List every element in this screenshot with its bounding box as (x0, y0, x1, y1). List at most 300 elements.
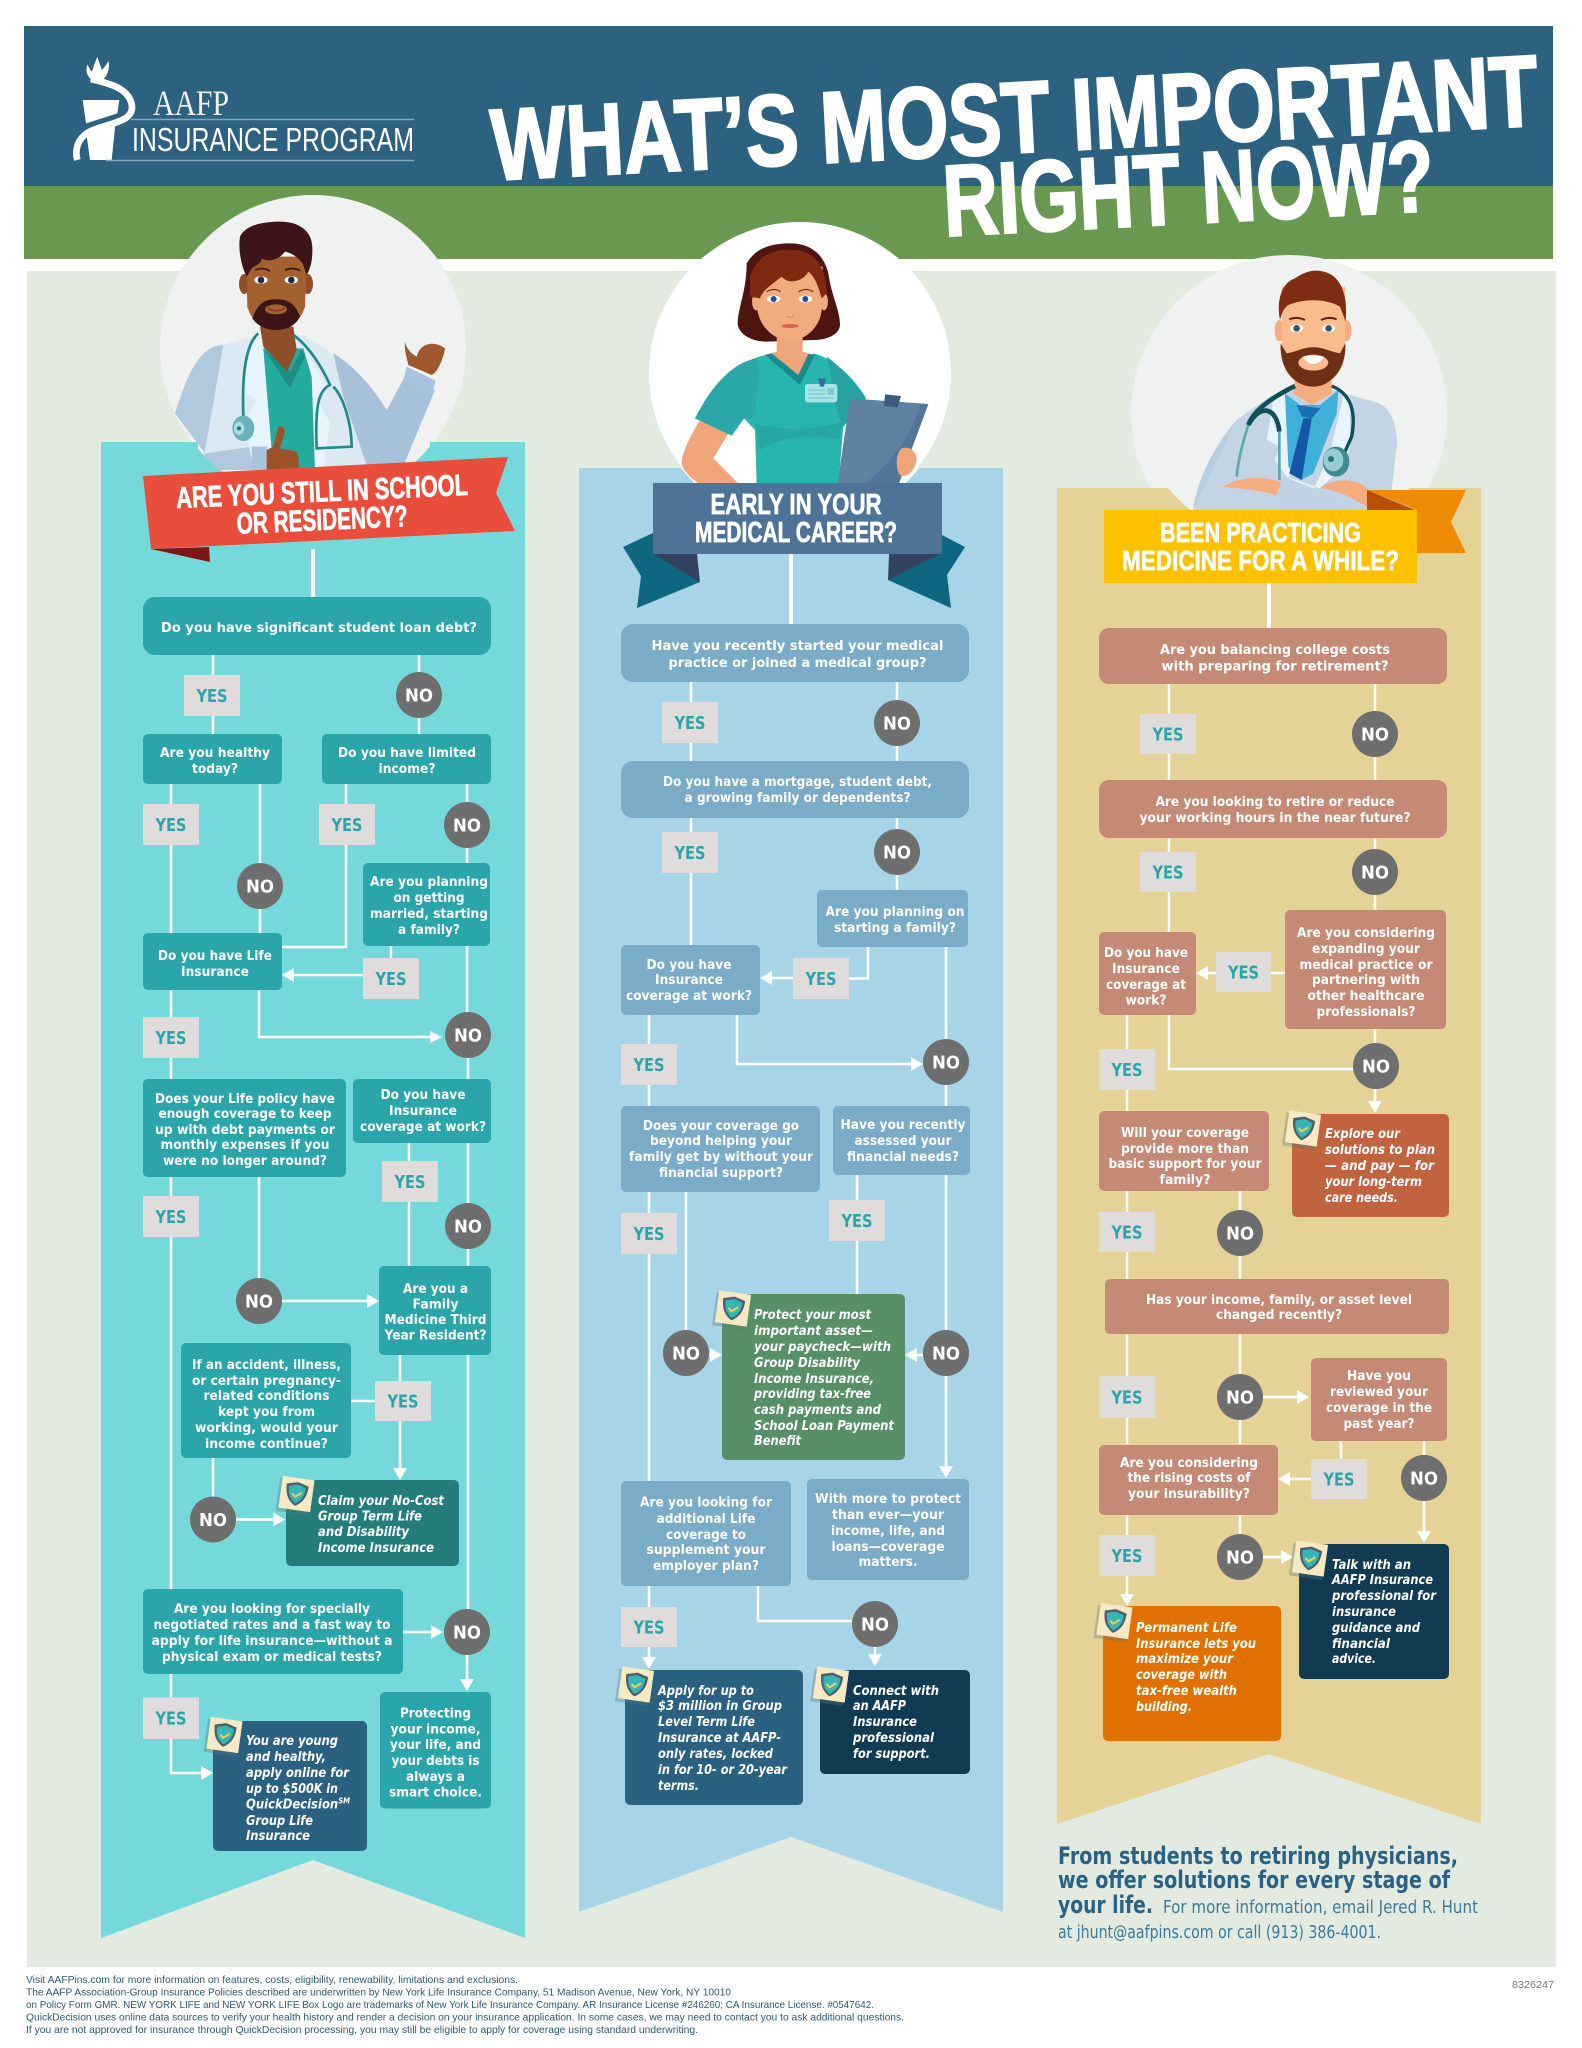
message: protecting your income: your income, (390, 1722, 480, 1738)
question: life insurance (143, 933, 282, 990)
question: getting married: married, starting (370, 906, 488, 922)
result: no-cost group term life: and Disability (318, 1524, 410, 1540)
result: permanent life insurance: maximize your (1136, 1651, 1234, 1667)
question: assessed financial needs: assessed your (854, 1133, 952, 1149)
question: coverage at work: Insurance (389, 1103, 457, 1119)
question: expanding practice: Are you considering (1297, 925, 1435, 941)
result: long-term care (1292, 1114, 1449, 1217)
title (488, 35, 1541, 258)
result: group level term life: only rates, locked (658, 1746, 773, 1762)
answer yes (662, 702, 718, 743)
message: protecting your income: Protecting (400, 1706, 471, 1722)
question: more than basic support: basic support for your (1108, 1156, 1262, 1172)
message: more to protect: than ever—your (832, 1507, 944, 1523)
legal fine print: QuickDecision uses online data sources to verify your health history and render a decision on your insurance application. In some cases, we may need to contact you to ask additional questions. (26, 2012, 904, 2024)
answer yes: YES (394, 1172, 426, 1193)
answer no (1352, 711, 1398, 757)
ribbon body: sand column (1057, 488, 1481, 1824)
result: group disability income insurance: important asset— (754, 1323, 873, 1339)
question: limited income (322, 734, 491, 784)
answer yes (829, 1200, 885, 1241)
icon: shield note (203, 1717, 243, 1757)
question: starting a family (817, 890, 968, 947)
question: expanding practice: partnering with (1312, 972, 1420, 988)
question: starting a family: Are you planning on (826, 904, 964, 920)
message: protecting your income: smart choice. (389, 1784, 482, 1800)
closing message: From students to retiring physicians, (1058, 1842, 1458, 1870)
result: connect with a professional: Connect with (853, 1683, 939, 1699)
answer yes: YES (633, 1224, 664, 1245)
question: started medical practice: practice or joined a medical group? (668, 655, 926, 671)
connector arrows: panel three (1120, 583, 1431, 1606)
question: coverage beyond helping family: Does your coverage go (643, 1118, 799, 1134)
answer no: NO (454, 1216, 482, 1238)
question: coverage at work: Do you have (646, 957, 732, 973)
result: no-cost group term life: Income Insurance (318, 1540, 434, 1556)
answer yes (1140, 714, 1196, 754)
answer yes (1216, 952, 1271, 992)
banner: early in your medical career: EARLY IN YOUR (710, 489, 882, 521)
answer no (663, 1330, 709, 1376)
answer yes (621, 1213, 677, 1254)
answer no (1217, 1534, 1263, 1580)
answer no: NO (199, 1510, 227, 1531)
question: additional life coverage: additional Life (656, 1511, 756, 1527)
result: connect with a professional: an AAFP (853, 1698, 906, 1714)
question: retire or reduce hours: your working hours in the near future? (1140, 810, 1410, 826)
question: retire or reduce hours (1099, 780, 1447, 838)
question: coverage at work: coverage at (1106, 977, 1186, 993)
result: talk with a professional (1299, 1544, 1449, 1679)
result: talk with a professional: financial (1332, 1636, 1390, 1652)
result: long-term care: care needs. (1325, 1190, 1398, 1206)
legal fine print: Visit AAFPins.com for more information on features, costs, eligibility, renewability, limitations and exclusions. (26, 1974, 518, 1986)
icon: shield note (275, 1476, 315, 1516)
banner: are you still in school or residency: OR RESIDENCY? (236, 500, 408, 541)
answer yes (184, 675, 240, 716)
result: permanent life insurance: Insurance lets you (1136, 1636, 1256, 1652)
question: mortgage or student debt: a growing family or dependents? (684, 790, 910, 806)
question: third year resident: Medicine Third (384, 1312, 486, 1328)
closing message: For more information, email Jered R. Hunt (1163, 1897, 1478, 1918)
answer yes (1099, 1049, 1155, 1090)
answer no: NO (1226, 1548, 1254, 1568)
answer yes: YES (1323, 1470, 1354, 1490)
question: college costs and retirement: Are you balancing college costs (1160, 642, 1390, 658)
circle overlap on column (198, 442, 430, 472)
message: protecting your income (380, 1692, 491, 1808)
answer yes: YES (1111, 1222, 1142, 1244)
result: connect with a professional: professional (852, 1730, 934, 1746)
document code: 8326247 (1512, 1979, 1554, 1991)
question: mortgage or student debt: Do you have a mortgage, student debt, (663, 774, 932, 790)
result: QuickDecision group life: apply online for (246, 1765, 350, 1781)
answer yes: YES (196, 686, 228, 707)
result: connect with a professional: Insurance (853, 1714, 917, 1730)
question: coverage at work: work? (1126, 992, 1166, 1008)
answer yes (1099, 1376, 1155, 1418)
question: expanding practice: medical practice or (1300, 957, 1433, 973)
question: additional life coverage: employer plan? (653, 1558, 759, 1574)
result: group disability income insurance: cash payments and (754, 1402, 881, 1418)
panel: still in school or residency (101, 195, 525, 1938)
question: third year resident: Are you a (403, 1281, 468, 1297)
result: QuickDecision group life: SM (338, 1796, 350, 1806)
question: rising costs of insurability: your insurability? (1128, 1486, 1250, 1502)
result: group level term life: terms. (658, 1778, 699, 1794)
answer yes: YES (155, 1708, 186, 1730)
answer yes: YES (674, 843, 706, 864)
result: group level term life (625, 1670, 803, 1805)
result: talk with a professional: AAFP Insurance (1331, 1572, 1433, 1588)
result: long-term care: your long-term (1325, 1174, 1422, 1190)
question: rising costs of insurability: the rising costs of (1128, 1470, 1251, 1486)
result: permanent life insurance: coverage with (1136, 1667, 1227, 1683)
question: expanding practice: professionals? (1316, 1004, 1416, 1020)
question: enough coverage: enough coverage to keep (158, 1106, 332, 1122)
answer yes: YES (633, 1618, 664, 1638)
answer yes (1311, 1459, 1367, 1499)
result: group level term life: Apply for up to (657, 1683, 754, 1699)
answer no (236, 1278, 282, 1324)
question: income, family, asset change: changed recently? (1216, 1307, 1342, 1323)
result: talk with a professional: professional for (1331, 1588, 1437, 1604)
result: group level term life: Insurance at AAFP- (658, 1730, 781, 1746)
answer yes: YES (1111, 1060, 1142, 1081)
answer no: NO (932, 1344, 960, 1364)
answer no: NO (1362, 1056, 1390, 1078)
question: getting married (363, 863, 490, 946)
question: limited income: Do you have limited (338, 745, 476, 761)
result: talk with a professional: Talk with an (1332, 1557, 1411, 1573)
question: starting a family: starting a family? (834, 920, 956, 936)
question: additional life coverage (621, 1481, 791, 1586)
result: group disability income insurance (722, 1294, 905, 1460)
answer no (237, 863, 283, 909)
banner: been practicing medicine for a while (1104, 490, 1466, 583)
answer no (444, 1609, 490, 1655)
closing message: your life. (1058, 1891, 1153, 1919)
banner: are you still in school or residency: ARE YOU STILL IN SCHOOL (175, 469, 469, 515)
question: coverage at work: coverage at work? (626, 988, 752, 1004)
question: more than basic support: family? (1160, 1172, 1210, 1188)
message: more to protect: loans—coverage (832, 1539, 944, 1555)
answer yes (1099, 1535, 1155, 1576)
question: reviewed coverage: reviewed your (1330, 1384, 1428, 1400)
question: rising costs of insurability (1099, 1445, 1278, 1515)
answer yes (143, 1196, 199, 1237)
answer no (445, 1203, 491, 1249)
question: more than basic support (1099, 1111, 1269, 1191)
answer no: NO (861, 1614, 889, 1636)
question: college costs and retirement: with preparing for retirement? (1162, 658, 1388, 674)
question: third year resident: Year Resident? (384, 1328, 486, 1344)
legal fine print: on Policy Form GMR. NEW YORK LIFE and NEW YORK LIFE Box Logo are trademarks of New York Life Insurance Company. AR Insurance License #246260; CA Insurance License. #0547642. (26, 1999, 874, 2011)
question: healthy today: today? (192, 761, 238, 777)
answer no (874, 700, 920, 746)
answer no (396, 672, 442, 718)
banner: been practicing medicine for a while: MEDICINE FOR A WHILE? (1122, 545, 1399, 576)
question: started medical practice (621, 624, 969, 682)
answer no (1353, 1043, 1399, 1089)
question: healthy today: Are you healthy (160, 745, 270, 761)
answer yes (1140, 852, 1196, 892)
message: more to protect (807, 1479, 969, 1580)
question: coverage at work: Insurance (655, 972, 723, 988)
answer no (1401, 1455, 1447, 1501)
question: third year resident (379, 1266, 491, 1355)
result: QuickDecision group life: Group Life (246, 1813, 313, 1829)
answer no: NO (1226, 1224, 1254, 1244)
question: coverage at work: Do you have (1104, 945, 1188, 961)
portrait circle: nurse (649, 222, 951, 524)
closing message (1058, 1842, 1478, 1943)
question: expanding practice: other healthcare (1308, 988, 1424, 1004)
illustration: nurse with clipboard (682, 243, 928, 485)
icon: shield note (810, 1666, 849, 1706)
question: student loan debt: Do you have significant student loan debt? (161, 620, 477, 636)
question: healthy today (143, 734, 282, 784)
answer no (1217, 1210, 1263, 1256)
result: QuickDecision group life: You are young (246, 1733, 338, 1749)
result: long-term care: Explore our (1325, 1126, 1401, 1142)
result: connect with a professional (820, 1670, 970, 1774)
question: student loan debt (143, 597, 491, 655)
answer yes: YES (633, 1055, 664, 1076)
answer yes (143, 1017, 199, 1058)
question: enough coverage: monthly expenses if you (160, 1137, 330, 1153)
question: income, family, asset change: Has your income, family, or asset level (1146, 1292, 1412, 1308)
answer yes: YES (1152, 862, 1184, 884)
answer yes: YES (1111, 1388, 1142, 1408)
question: enough coverage: Does your Life policy have (155, 1091, 335, 1107)
question: getting married: Are you planning (370, 874, 488, 890)
answer yes (621, 1607, 677, 1647)
ribbon body: blue column (579, 468, 1003, 1912)
question: accident or illness: or certain pregnancy- (192, 1373, 341, 1389)
answer yes: YES (805, 969, 836, 990)
header band (24, 26, 1553, 259)
question: enough coverage: were no longer around? (163, 1153, 327, 1169)
answer yes (1099, 1212, 1155, 1252)
answer no: NO (672, 1344, 700, 1364)
icon: shield note (1093, 1603, 1133, 1643)
question: coverage at work (353, 1079, 491, 1143)
question: coverage beyond helping family: family get by without your (629, 1149, 813, 1165)
answer no: NO (883, 842, 911, 864)
result: group disability income insurance: School Loan Payment (754, 1418, 894, 1434)
question: specially negotiated rates: apply for life insurance—without a (152, 1633, 392, 1649)
question: specially negotiated rates: negotiated rates and a fast way to (154, 1617, 390, 1633)
result: talk with a professional: advice. (1332, 1651, 1376, 1667)
question: reviewed coverage: coverage in the (1326, 1400, 1432, 1416)
banner: been practicing medicine for a while: BEEN PRACTICING (1160, 517, 1361, 548)
result: QuickDecision group life: and healthy, (246, 1749, 326, 1765)
result: connect with a professional: for support. (853, 1746, 930, 1762)
answer no: NO (453, 1622, 481, 1644)
answer no: NO (454, 1026, 482, 1046)
answer no: NO (1410, 1468, 1438, 1490)
answer yes: YES (1111, 1546, 1142, 1567)
banner: early in your medical career: MEDICAL CAREER? (695, 517, 897, 549)
answer yes: YES (331, 815, 362, 836)
answer yes: YES (375, 969, 406, 990)
answer yes (319, 804, 375, 845)
question: more than basic support: provide more than (1121, 1141, 1249, 1157)
circle overlap on column (681, 468, 919, 526)
answer yes (375, 1381, 431, 1421)
answer yes (662, 832, 718, 873)
answer no (923, 1039, 969, 1085)
answer yes (793, 958, 849, 999)
answer yes: YES (155, 1207, 186, 1228)
portrait circle: senior doctor (1131, 255, 1447, 571)
result: no-cost group term life (286, 1480, 459, 1566)
result: group disability income insurance: providing tax-free (753, 1386, 871, 1402)
result: group disability income insurance: Benefit (754, 1433, 801, 1449)
result: group disability income insurance: Protect your most (754, 1307, 871, 1323)
icon: shield note (1289, 1540, 1328, 1580)
answer no (923, 1330, 969, 1376)
question: accident or illness (181, 1343, 351, 1458)
result: group level term life: Level Term Life (658, 1714, 755, 1730)
question: specially negotiated rates: physical exam or medical tests? (162, 1649, 382, 1665)
result: QuickDecision group life: up to $500K in (246, 1781, 338, 1797)
legal fine print: If you are not approved for insurance through QuickDecision processing, you may still be eligible to apply for coverage using standard underwriting. (26, 2024, 698, 2036)
result: talk with a professional: guidance and (1332, 1620, 1420, 1636)
question: accident or illness: working, would your (195, 1420, 338, 1436)
result: QuickDecision group life: QuickDecision (246, 1796, 353, 1812)
question: assessed financial needs (833, 1106, 970, 1175)
panel: early in your medical career (579, 222, 1003, 1912)
answer no (874, 829, 920, 875)
message: protecting your income: always a (406, 1769, 465, 1785)
question: expanding practice: expanding your (1312, 941, 1420, 957)
question: mortgage or student debt (621, 761, 969, 818)
result: group disability income insurance: your paycheck—with (754, 1339, 891, 1355)
question: coverage beyond helping family: beyond helping your (650, 1133, 792, 1149)
question: rising costs of insurability: Are you considering (1120, 1455, 1258, 1471)
question: limited income: income? (378, 761, 436, 777)
result: talk with a professional: insurance (1332, 1604, 1396, 1620)
answer yes: YES (674, 713, 706, 734)
answer yes: YES (841, 1211, 872, 1232)
question: accident or illness: income continue? (205, 1436, 328, 1452)
question: specially negotiated rates: Are you looking for specially (174, 1601, 370, 1617)
portrait circle: resident (160, 195, 466, 501)
message: more to protect: income, life, and (831, 1523, 945, 1539)
answer no (1352, 849, 1398, 895)
result: long-term care: solutions to plan (1325, 1142, 1435, 1158)
result: group level term life: $3 million in Group (658, 1698, 782, 1714)
title: RIGHT NOW? (940, 120, 1436, 258)
result: permanent life insurance: building. (1136, 1699, 1192, 1715)
question: more than basic support: Will your coverage (1121, 1125, 1249, 1141)
logo: AAFP Insurance Program (76, 57, 414, 160)
answer no: NO (932, 1052, 960, 1074)
question: assessed financial needs: Have you recently (840, 1117, 966, 1133)
question: started medical practice: Have you recently started your medical (652, 638, 944, 654)
question: getting married: a family? (398, 922, 460, 938)
question: coverage at work: Insurance (1112, 961, 1180, 977)
result: long-term care: — and pay — for (1325, 1158, 1435, 1174)
question: accident or illness: If an accident, illness, (192, 1357, 341, 1373)
question: reviewed coverage: past year? (1344, 1416, 1414, 1432)
answer no: NO (1361, 862, 1389, 884)
answer no (1217, 1374, 1263, 1420)
result: permanent life insurance: Permanent Life (1136, 1620, 1237, 1636)
question: reviewed coverage (1311, 1358, 1447, 1441)
panel: been practicing medicine for a while (1057, 255, 1481, 1824)
answer yes: YES (1152, 724, 1184, 746)
answer yes: YES (1227, 962, 1259, 984)
connector arrows: panel one (171, 549, 474, 1780)
question: accident or illness: related conditions (204, 1388, 330, 1404)
result: group disability income insurance: Group Disability (754, 1355, 861, 1371)
legal fine print: The AAFP Association-Group Insurance Policies described are underwritten by New York Life Insurance Company, 51 Madison Avenue, New York, NY 10010 (26, 1986, 731, 1998)
result: group level term life: in for 10- or 20-year (658, 1762, 788, 1778)
question: enough coverage (143, 1079, 346, 1177)
answer no (444, 802, 490, 848)
question: coverage beyond helping family: financial support? (659, 1165, 783, 1181)
banner: early in your medical career (623, 483, 965, 608)
ribbon body: teal column (101, 442, 525, 1938)
answer yes: YES (155, 815, 186, 836)
circle overlap on column (1168, 488, 1410, 544)
question: third year resident: Family (412, 1296, 459, 1312)
question: additional life coverage: supplement your (646, 1542, 766, 1558)
result: QuickDecision group life: Insurance (246, 1828, 310, 1844)
illustration: doctor with thumbs up (175, 222, 445, 470)
connector arrows: panel two (642, 554, 953, 1669)
question: coverage at work: Do you have (380, 1087, 466, 1103)
question: specially negotiated rates (143, 1589, 403, 1674)
question: enough coverage: up with debt payments or (155, 1122, 335, 1138)
answer yes (143, 1698, 199, 1739)
answer yes (143, 804, 199, 845)
question: additional life coverage: Are you looking for (640, 1494, 772, 1510)
answer no: NO (453, 816, 481, 836)
message: more to protect: matters. (858, 1554, 918, 1570)
result: QuickDecision group life (213, 1721, 367, 1851)
question: coverage at work (1099, 932, 1196, 1015)
question: expanding practice (1285, 910, 1446, 1029)
question: accident or illness: kept you from (218, 1404, 315, 1420)
logo: AAFP Insurance Program: AAFP (153, 83, 229, 123)
answer yes (363, 958, 419, 999)
question: coverage at work (621, 945, 760, 1015)
banner: are you still in school or residency (143, 457, 515, 562)
icon: shield note (712, 1290, 751, 1330)
answer no: NO (1226, 1388, 1254, 1408)
message: protecting your income: your life, and (390, 1737, 481, 1753)
closing message: we offer solutions for every stage of (1058, 1866, 1450, 1894)
result: permanent life insurance (1103, 1606, 1281, 1741)
answer no: NO (245, 1292, 273, 1312)
icon: shield note (615, 1666, 654, 1706)
result: group disability income insurance: Income Insurance, (754, 1371, 874, 1387)
answer no (190, 1496, 236, 1542)
answer yes: YES (387, 1392, 418, 1412)
answer no: NO (405, 686, 433, 706)
answer yes (621, 1044, 677, 1085)
question: coverage at work: coverage at work? (360, 1119, 486, 1135)
logo: AAFP Insurance Program: INSURANCE PROGRAM (132, 121, 414, 158)
answer no: NO (246, 876, 274, 898)
answer no (852, 1601, 898, 1647)
icon: shield note (1282, 1110, 1321, 1150)
question: getting married: on getting (394, 890, 464, 906)
